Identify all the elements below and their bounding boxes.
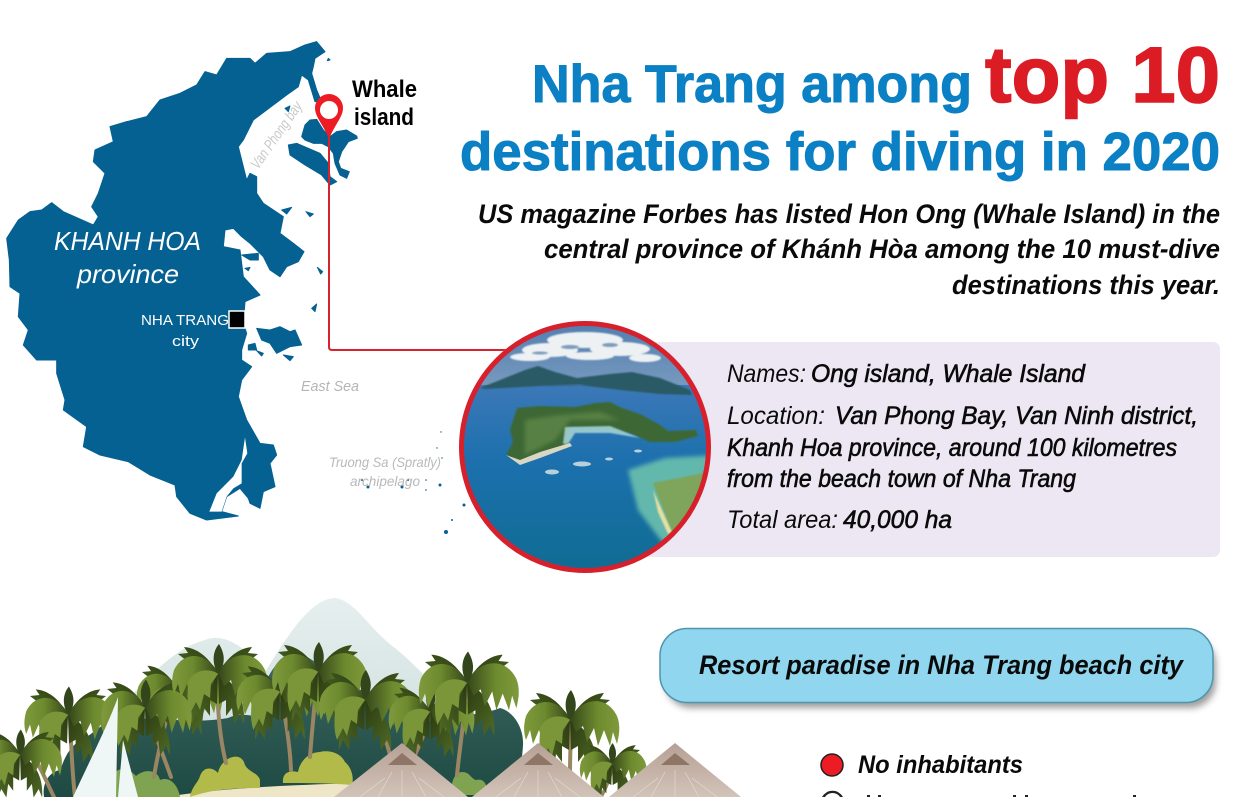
fact: location: Location: [727, 402, 825, 430]
label: Truong Sa archipelago: Truong Sa (Spratly) [329, 454, 441, 470]
heading pill: Resort paradise: Resort paradise in Nha Trang beach city [699, 650, 1185, 680]
fact: location: Khanh Hoa province, around 100 kilometres [727, 434, 1177, 462]
huts [334, 743, 741, 797]
map: Khanh Hoa province [7, 42, 466, 534]
fact: total area [727, 506, 952, 534]
intro text: destinations this year. [952, 270, 1220, 300]
hut 2 [472, 743, 604, 797]
fact: total area: Total area: [727, 506, 838, 534]
mainland shape [7, 42, 325, 520]
label: Nha Trang city [141, 312, 229, 350]
fact: names: Names: [727, 360, 806, 388]
connector line: pin to photo [329, 130, 520, 350]
heading pill: Resort paradise [660, 628, 1216, 708]
label: Khanh Hoa province [54, 226, 201, 289]
sailboat [73, 697, 138, 797]
Whale island: upper body [302, 119, 357, 178]
marker: Nha Trang square [229, 311, 245, 328]
hut 1 [334, 743, 468, 797]
label: Truong Sa archipelago [329, 454, 441, 489]
boats [545, 450, 642, 474]
photo: aerial view of Whale Island [455, 320, 720, 575]
illustration: tropical island [0, 598, 741, 797]
title: Nha Trang among [532, 55, 972, 114]
title: top 10 [985, 30, 1220, 119]
palm trees [0, 642, 647, 797]
label: Truong Sa archipelago: archipelago [350, 473, 420, 489]
hut 3 [609, 743, 741, 797]
crowns [24, 686, 115, 762]
label: Nha Trang city: NHA TRANG [141, 312, 229, 329]
bullet: no inhabitants: No inhabitants [858, 751, 1023, 779]
sand [165, 783, 420, 797]
Nha Trang bay islands [257, 327, 302, 353]
fact: names: Ong island, Whale Island [811, 360, 1086, 388]
panel: island facts [640, 342, 1220, 557]
label: Whale island [352, 76, 417, 131]
intro text: central province of Khánh Hòa among the 10 must-dive [544, 234, 1220, 264]
label: Khanh Hoa province: province [76, 259, 179, 289]
title: destinations for diving in 2020 [460, 122, 1220, 182]
fact: location: from the beach town of Nha Trang [727, 465, 1076, 493]
label: Van Phong bay: Van Phong bay [247, 98, 307, 172]
icon: location pin [315, 94, 343, 139]
shrubs [115, 751, 487, 797]
label: Whale island: Whale [352, 76, 417, 103]
fact: total area: 40,000 ha [843, 506, 952, 534]
trunks [33, 668, 612, 797]
clouds [510, 332, 661, 362]
southern inlet [209, 437, 247, 512]
mountains [100, 598, 445, 740]
fact: location [727, 402, 1198, 493]
label: Khanh Hoa province: KHANH HOA [54, 226, 201, 256]
fact: location: Van Phong Bay, Van Ninh district, [835, 402, 1198, 430]
reef and shore [626, 454, 706, 542]
label: Whale island: island [354, 104, 414, 131]
title [460, 30, 1220, 182]
distant mountains [480, 366, 692, 395]
label: Nha Trang city: city [172, 333, 200, 350]
bullet: next item, cut off by page edge [822, 791, 1136, 797]
archipelago dots [361, 431, 466, 534]
Whale island: lower arm [288, 143, 337, 185]
forest [44, 652, 523, 797]
label: East Sea: East Sea [301, 378, 359, 395]
intro text [478, 199, 1220, 300]
main island [506, 402, 698, 463]
